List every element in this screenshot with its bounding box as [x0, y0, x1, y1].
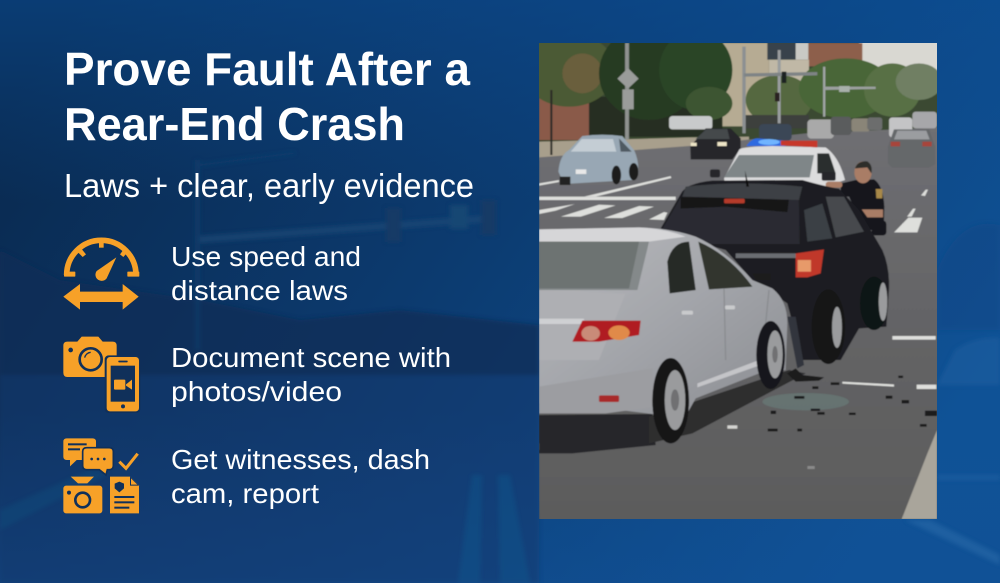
title: Prove Fault After a [64, 43, 470, 95]
item: document the scene [63, 337, 451, 413]
subtitle: Laws + clear, early evidence [64, 167, 474, 204]
road markings [539, 176, 936, 450]
car: dark sedan [690, 128, 741, 159]
street poles, sign and traffic signals [550, 43, 876, 155]
text: witnesses, dash cam, report: Get witnesses, dash [171, 444, 430, 475]
police cruiser with light bar [710, 138, 845, 187]
title [64, 43, 470, 150]
text: document scene [171, 342, 451, 407]
car: silver sedan far left [558, 135, 638, 185]
black SUV [661, 171, 889, 364]
text: witnesses, dash cam, report: cam, report [171, 478, 319, 509]
crash debris and broken glass [727, 317, 937, 469]
text: document scene: Document scene with [171, 342, 451, 373]
silver sedan struck from behind [539, 227, 806, 453]
panel: crash scene photo [522, 27, 942, 520]
icon: speedometer with double arrow [63, 238, 139, 310]
title: Rear-End Crash [64, 98, 405, 150]
item: witnesses, dash cam, report [63, 438, 430, 513]
police officer [826, 161, 886, 235]
text: speed and distance laws: distance laws [171, 275, 348, 306]
photo backdrop: sky, buildings and trees [539, 43, 937, 160]
text: document scene: photos/video [171, 376, 342, 407]
text: speed and distance laws [171, 241, 361, 306]
distant traffic [759, 112, 937, 141]
icon: chat bubbles, check, dash cam and report [63, 438, 139, 513]
road [539, 127, 939, 520]
icon: camera and phone with video [63, 337, 140, 413]
item: speed and distance laws [63, 238, 361, 310]
car: grey sedan right lane [888, 128, 934, 150]
text: witnesses, dash cam, report [171, 444, 430, 509]
curb [902, 430, 937, 519]
text: speed and distance laws: Use speed and [171, 241, 361, 272]
